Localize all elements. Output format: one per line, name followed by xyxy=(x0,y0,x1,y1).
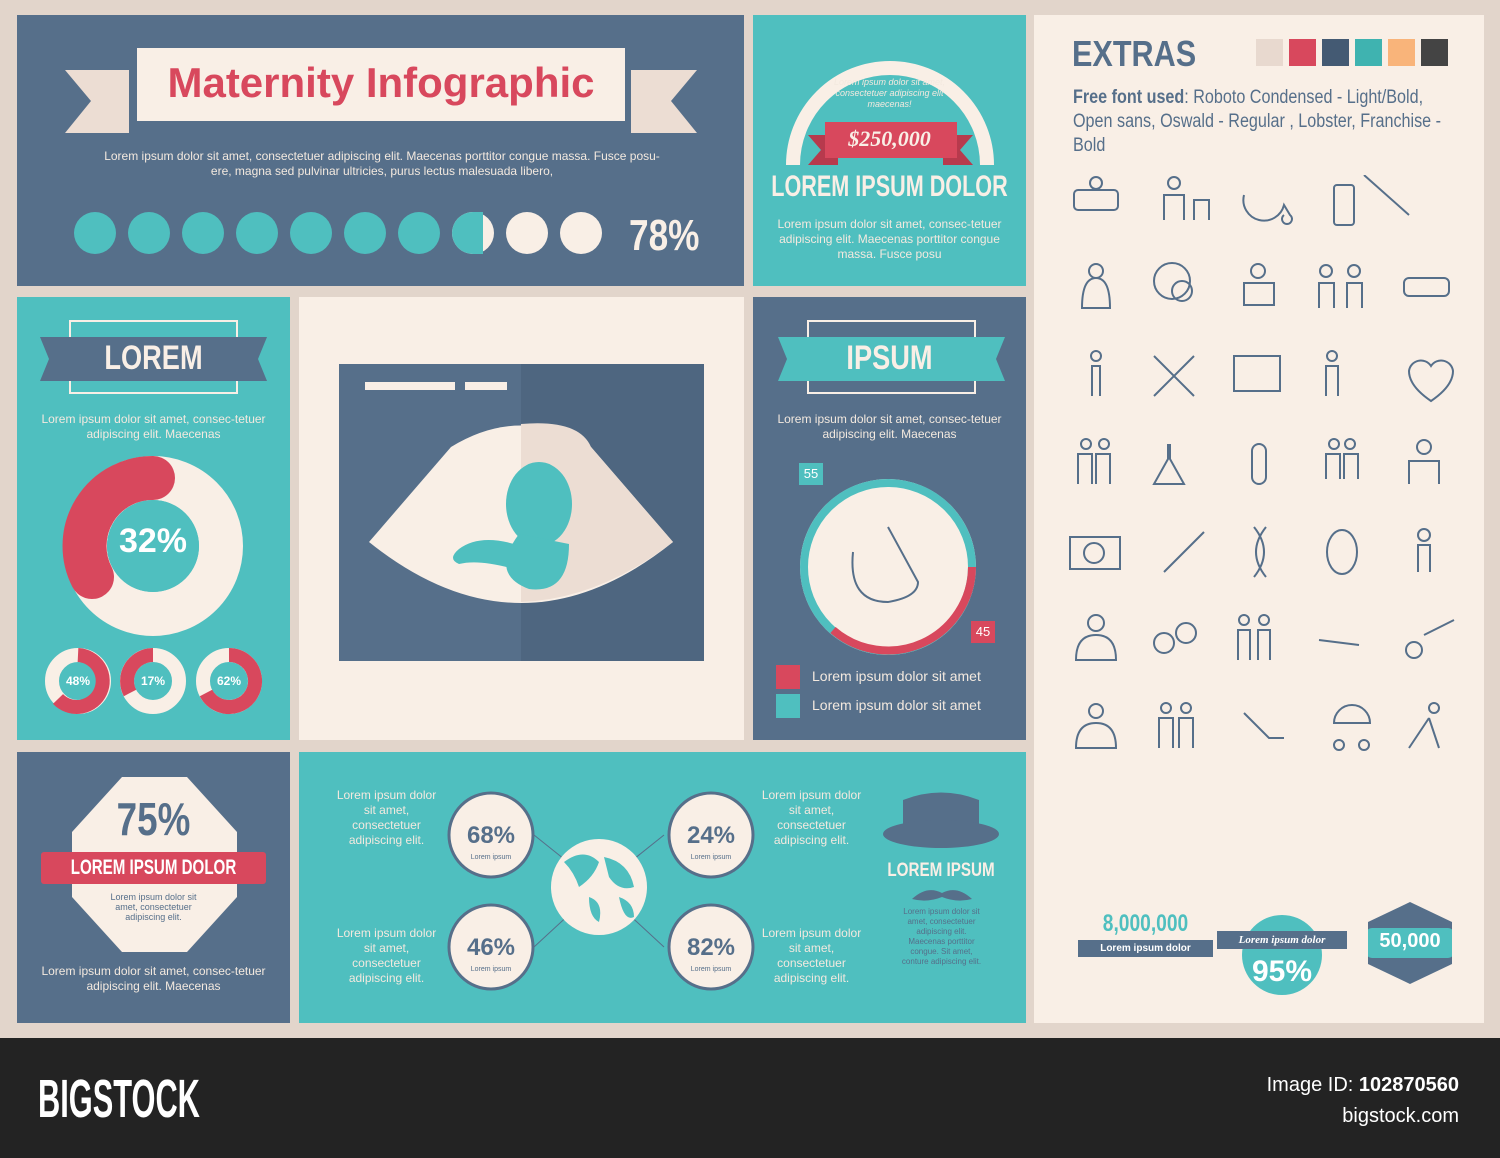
image id: bigstock.com xyxy=(1342,1105,1459,1127)
image id: Image ID: 102870560 xyxy=(1267,1074,1459,1096)
circles and globe xyxy=(448,792,754,990)
panel: lorem donut: LOREM xyxy=(104,339,203,377)
small donuts: 48% xyxy=(66,674,90,688)
panel: ipsum donut: Lorem ipsum dolor sit amet, consec-tetuer adipiscing elit. Maecenas xyxy=(777,412,1002,441)
panel: world stats xyxy=(299,752,1026,1023)
extras heading: EXTRAS xyxy=(1072,33,1196,74)
title: Maternity Infographic xyxy=(167,59,595,106)
panel: money xyxy=(753,15,1026,286)
panel: ipsum donut: IPSUM xyxy=(846,339,933,377)
badge: 8,000,000: Lorem ipsum dolor xyxy=(1100,943,1191,954)
panel: lorem donut xyxy=(17,297,290,740)
panel: lorem donut: Lorem ipsum dolor sit amet, consec-tetuer adipiscing elit. Maecenas xyxy=(41,412,266,441)
badge: 95%: 95% xyxy=(1252,955,1312,988)
image id xyxy=(1267,1074,1459,1127)
panel: ipsum donut xyxy=(753,297,1026,740)
red ribbon xyxy=(41,852,266,884)
small donuts: 62% xyxy=(217,674,241,688)
circles and globe: 46% xyxy=(467,934,515,961)
panel: world stats: Lorem ipsum dolor sit amet, consectetuer adipiscing elit. xyxy=(337,926,436,985)
badge: 8,000,000: 8,000,000 xyxy=(1103,910,1188,937)
intro text: ere, magna sed pulvinar ultricies, purus lectus malesuada libero, xyxy=(211,164,553,178)
small donuts: 17% xyxy=(141,674,165,688)
panel: world stats: Lorem ipsum dolor sit amet, consectetuer adipiscing elit. xyxy=(762,788,861,847)
percentage 78%: 78% xyxy=(629,211,699,260)
arc and ribbon xyxy=(786,61,994,165)
panel: 75%: Lorem ipsum dolor sit amet, consec-tetuer adipiscing elit. Maecenas xyxy=(41,964,266,993)
panel: 75%: LOREM IPSUM DOLOR xyxy=(71,856,236,879)
badge: 95% xyxy=(1217,915,1347,995)
panel: header xyxy=(17,15,744,286)
panel: world stats: Lorem ipsum dolor sit amet, consectetuer adipiscing elit. Maecenas porttitor congue. Sit amet, conture adipiscing elit. xyxy=(902,907,981,966)
panel: world stats: LOREM IPSUM xyxy=(887,860,995,881)
icon grid xyxy=(1069,175,1454,751)
banner: Lorem xyxy=(40,320,267,394)
panel: extras xyxy=(1034,15,1484,1023)
panel: money: Lorem ipsum dolor sit amet, consec-tetuer adipiscing elit. Maecenas porttitor congue massa. Fusce posu xyxy=(777,217,1002,261)
fonts text: Free font used: Roboto Condensed - Light/Bold, Open sans, Oswald - Regular , Lobster, Franchise - Bold xyxy=(1073,87,1441,156)
intro text xyxy=(104,149,660,178)
donut 32% xyxy=(62,456,243,636)
circles and globe: 82% xyxy=(687,934,735,961)
badge: 50,000 xyxy=(1368,902,1452,984)
panel: money: Lorem ipsum dolor sit amet, consectetuer adipiscing elit maecenas! xyxy=(834,77,945,109)
badge: 8,000,000 xyxy=(1078,910,1213,957)
panel: world stats: Lorem ipsum dolor sit amet, consectetuer adipiscing elit. xyxy=(337,788,436,847)
circles and globe: Lorem ipsum xyxy=(471,854,511,861)
panel: world stats: Lorem ipsum dolor sit amet, consectetuer adipiscing elit. xyxy=(762,926,861,985)
panel: 75% xyxy=(17,752,290,1023)
badge: 50,000: 50,000 xyxy=(1379,930,1441,952)
panel: ultrasound xyxy=(299,297,744,740)
legend xyxy=(776,665,981,718)
circles and globe: 24% xyxy=(687,822,735,849)
brand: BIGSTOCK xyxy=(38,1069,200,1129)
circles and globe: 68% xyxy=(467,822,515,849)
color swatches xyxy=(1256,39,1448,66)
small donuts xyxy=(45,648,262,714)
panel: 75%: Lorem ipsum dolor sit amet, consectetuer adipiscing elit. xyxy=(110,892,197,922)
title ribbon xyxy=(65,48,697,133)
heading: LOREM IPSUM DOLOR xyxy=(771,170,1008,203)
amount: $250,000 xyxy=(848,126,931,151)
panel: ipsum donut: 45 xyxy=(976,624,990,639)
circles and globe: Lorem ipsum xyxy=(471,966,511,973)
dot progress 78% xyxy=(74,212,602,254)
panel: ipsum donut: 55 xyxy=(804,466,818,481)
badge: 95%: Lorem ipsum dolor xyxy=(1239,934,1325,946)
hat & mustache xyxy=(883,792,999,848)
panel: lorem donut: 32% xyxy=(119,522,187,560)
panel: 75%: 75% xyxy=(117,793,190,845)
circles and globe: Lorem ipsum xyxy=(691,966,731,973)
circles and globe: Lorem ipsum xyxy=(691,854,731,861)
footer xyxy=(0,1038,1500,1158)
legend: Lorem ipsum dolor sit amet xyxy=(812,697,981,713)
legend: Lorem ipsum dolor sit amet xyxy=(812,668,981,684)
ring chart 55/45 xyxy=(800,479,976,655)
intro text: Lorem ipsum dolor sit amet, consectetuer adipiscing elit. Maecenas porttitor congue massa. Fusce posu- xyxy=(104,149,660,163)
